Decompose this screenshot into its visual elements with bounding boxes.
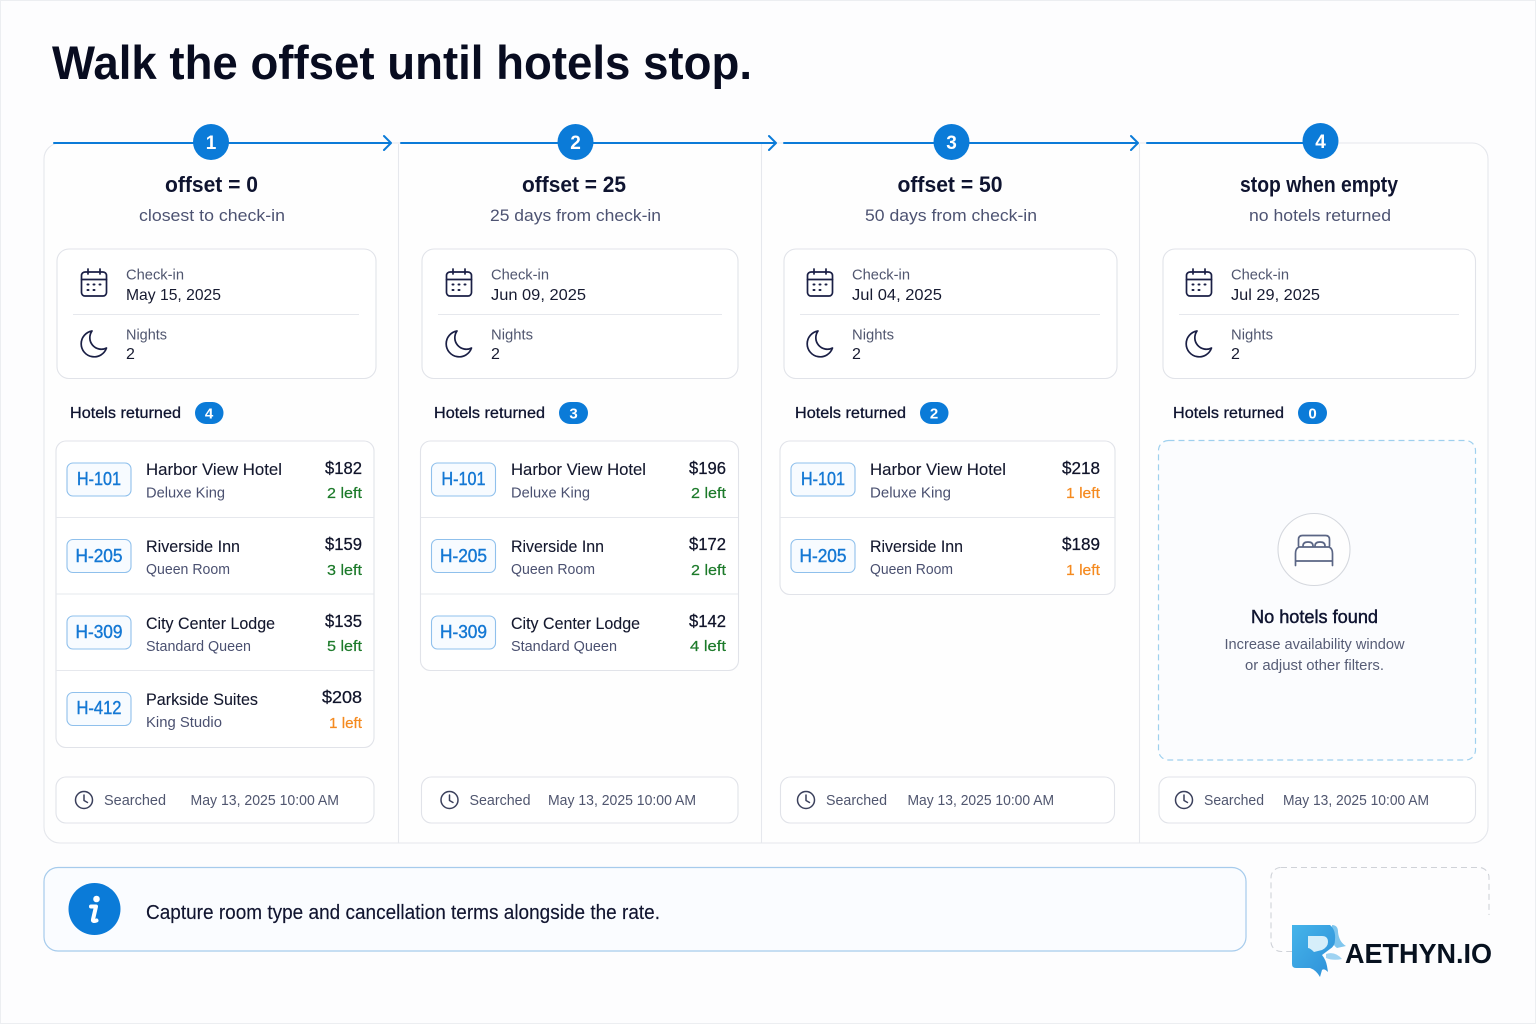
column 3 hotels returned count: Hotels returned bbox=[795, 405, 906, 422]
column 1 heading: offset = 0 bbox=[165, 172, 258, 197]
hotel row H-101: 2 left bbox=[691, 485, 727, 502]
hotel row H-101: Deluxe King bbox=[870, 484, 951, 502]
hotel row H-101: 2 left bbox=[327, 485, 363, 502]
check-in date: Jul 29, 2025 bbox=[1231, 287, 1320, 304]
nights: Nights bbox=[1231, 328, 1273, 344]
check-in date bbox=[1231, 268, 1320, 304]
empty state heading: No hotels found bbox=[1251, 607, 1378, 627]
empty dashed placeholder bbox=[1271, 868, 1489, 952]
column 1 hotels returned count: Hotels returned bbox=[70, 405, 181, 422]
check-in date: Jun 09, 2025 bbox=[491, 287, 586, 304]
nights bbox=[491, 328, 533, 363]
hotel row H-101 bbox=[67, 458, 363, 502]
check-in date: Jul 04, 2025 bbox=[852, 287, 942, 304]
check-in date: Check-in bbox=[852, 268, 910, 284]
check-in date: May 15, 2025 bbox=[126, 287, 221, 304]
icon: calendar bbox=[82, 269, 106, 296]
step marker 3 bbox=[934, 124, 970, 160]
column 3 query card bbox=[784, 249, 1117, 378]
hotel row H-309: H-309 bbox=[440, 622, 487, 642]
hotel row H-309 bbox=[432, 611, 727, 655]
column 3 hotels returned count: 2 bbox=[930, 406, 938, 422]
hotel row H-101: H-101 bbox=[801, 469, 845, 489]
nights: 2 bbox=[852, 346, 861, 363]
column 4 hotels returned count: 0 bbox=[1308, 406, 1317, 422]
title: Walk the offset until hotels stop. bbox=[52, 37, 752, 90]
column 2 hotels returned count: 3 bbox=[569, 406, 578, 422]
hotel row H-205: H-205 bbox=[440, 546, 487, 566]
step marker 2: 2 bbox=[570, 133, 581, 154]
check-in date: Check-in bbox=[126, 268, 184, 284]
hotel row H-309: Standard Queen bbox=[146, 638, 251, 655]
column 3: offset 50 bbox=[780, 172, 1117, 823]
column 2 subheading: 25 days from check-in bbox=[490, 206, 661, 225]
nights bbox=[126, 328, 167, 363]
hotel row H-205 bbox=[67, 534, 363, 579]
step marker 4: 4 bbox=[1315, 132, 1326, 153]
column 1 query card bbox=[57, 249, 376, 378]
column 3 hotel list bbox=[780, 441, 1115, 594]
logo: AETHYN.IO: AETHYN.IO bbox=[1345, 938, 1492, 969]
hotel row H-309: $135 bbox=[325, 611, 362, 631]
hotel row H-205: $189 bbox=[1062, 534, 1100, 554]
step marker 2 bbox=[558, 124, 594, 160]
nights: Nights bbox=[491, 328, 533, 344]
hotel row H-205: 2 left bbox=[691, 562, 727, 579]
step marker 4 bbox=[1302, 123, 1338, 159]
column 3 searched timestamp: Searched bbox=[826, 792, 887, 809]
nights: Nights bbox=[852, 328, 894, 344]
hotel row H-309: City Center Lodge bbox=[146, 614, 275, 633]
hotel row H-101: Harbor View Hotel bbox=[146, 460, 282, 479]
hotel row H-412: King Studio bbox=[146, 714, 222, 731]
hotel row H-309: H-309 bbox=[76, 622, 122, 642]
check-in date bbox=[852, 268, 942, 304]
column 1 hotel list bbox=[56, 441, 374, 748]
column 1 subheading: closest to check-in bbox=[139, 206, 285, 225]
hotel row H-101: $196 bbox=[689, 458, 726, 478]
hotel row H-101: H-101 bbox=[442, 469, 486, 489]
column 3 subheading: 50 days from check-in bbox=[865, 206, 1037, 225]
hotel row H-309: $142 bbox=[689, 611, 726, 631]
hotel row H-412: H-412 bbox=[76, 698, 122, 718]
hotel row H-412 bbox=[67, 687, 363, 732]
hotel row H-309: 5 left bbox=[327, 638, 363, 655]
hotel row H-205 bbox=[791, 534, 1101, 579]
column 3 heading: offset = 50 bbox=[898, 172, 1002, 197]
icon: calendar bbox=[1186, 269, 1212, 296]
icon: bed bbox=[1278, 514, 1350, 586]
hotel row H-205: Queen Room bbox=[146, 561, 230, 578]
hotel row H-205: Riverside Inn bbox=[146, 537, 240, 556]
column 4 heading: stop when empty bbox=[1240, 172, 1399, 197]
hotel row H-205: Queen Room bbox=[511, 561, 595, 578]
hotel row H-101: Deluxe King bbox=[511, 484, 590, 502]
empty state message: Increase availability window bbox=[1224, 637, 1405, 653]
icon: calendar bbox=[808, 269, 832, 296]
column 2 heading: offset = 25 bbox=[522, 172, 626, 197]
hotel row H-101: Harbor View Hotel bbox=[511, 460, 646, 479]
check-in date bbox=[126, 268, 221, 304]
hotel row H-205: 3 left bbox=[327, 562, 363, 579]
step marker 1: 1 bbox=[206, 133, 217, 154]
hotel row H-205: H-205 bbox=[800, 546, 846, 566]
hotel row H-205: $159 bbox=[325, 534, 362, 554]
check-in date: Check-in bbox=[1231, 268, 1289, 284]
column 4 searched timestamp bbox=[1159, 777, 1476, 823]
icon: calendar bbox=[446, 269, 472, 296]
column 4 searched timestamp: May 13, 2025 10:00 AM bbox=[1283, 792, 1429, 809]
hotel row H-101: Harbor View Hotel bbox=[870, 460, 1006, 479]
hotel row H-205: $172 bbox=[689, 534, 726, 554]
hotel row H-309: 4 left bbox=[690, 638, 727, 655]
column 4 hotels returned count: Hotels returned bbox=[1173, 405, 1284, 422]
column 1 hotels returned count bbox=[70, 402, 224, 424]
hotel row H-309: Standard Queen bbox=[511, 638, 617, 655]
panel: four-step container bbox=[44, 143, 1488, 843]
column 2 searched timestamp bbox=[422, 777, 738, 823]
column 1 searched timestamp: May 13, 2025 10:00 AM bbox=[190, 792, 339, 809]
icon: info bbox=[68, 883, 120, 935]
hotel row H-101: Deluxe King bbox=[146, 484, 225, 502]
hotel row H-205: Riverside Inn bbox=[511, 537, 604, 556]
empty state message bbox=[1224, 637, 1405, 674]
hotel row H-412: 1 left bbox=[329, 715, 363, 732]
hotel row H-412: Parkside Suites bbox=[146, 690, 258, 709]
icon: moon bbox=[81, 331, 106, 357]
logo: AETHYN.IO bbox=[1292, 925, 1492, 977]
empty state panel bbox=[1158, 440, 1476, 760]
column 1 searched timestamp: Searched bbox=[104, 792, 166, 809]
nights: 2 bbox=[126, 346, 135, 363]
column 2 hotel list bbox=[420, 441, 738, 670]
hotel row H-205: 1 left bbox=[1066, 562, 1101, 579]
hotel row H-205: Queen Room bbox=[870, 561, 953, 578]
hotel row H-309: City Center Lodge bbox=[511, 614, 640, 633]
hotel row H-101: $182 bbox=[325, 458, 362, 478]
column 4 query card bbox=[1163, 249, 1476, 378]
column 3 searched timestamp: May 13, 2025 10:00 AM bbox=[908, 792, 1054, 809]
callout text: Capture room type and cancellation terms alongside the rate. bbox=[146, 902, 660, 924]
hotel row H-101 bbox=[791, 458, 1101, 502]
empty state message: or adjust other filters. bbox=[1245, 658, 1384, 674]
callout: capture tip bbox=[44, 868, 1246, 951]
column 3 searched timestamp bbox=[780, 777, 1114, 823]
column 2: offset 25 bbox=[420, 172, 738, 823]
check-in date bbox=[491, 268, 586, 304]
hotel row H-101: H-101 bbox=[77, 469, 121, 489]
hotel row H-205: H-205 bbox=[76, 546, 122, 566]
step marker 1 bbox=[193, 124, 229, 160]
column 2 hotels returned count bbox=[434, 402, 588, 424]
hotel row H-205 bbox=[432, 534, 727, 579]
column 4: stop when empty bbox=[1158, 172, 1476, 823]
icon: moon bbox=[807, 331, 832, 357]
icon: moon bbox=[1186, 331, 1212, 357]
hotel row H-101: 1 left bbox=[1066, 485, 1101, 502]
column 4 searched timestamp: Searched bbox=[1204, 792, 1264, 809]
hotel row H-205: Riverside Inn bbox=[870, 537, 963, 556]
nights: Nights bbox=[126, 328, 167, 344]
hotel row H-101 bbox=[432, 458, 727, 502]
column 1 hotels returned count: 4 bbox=[205, 406, 214, 422]
column 2 searched timestamp: May 13, 2025 10:00 AM bbox=[548, 792, 696, 809]
column 4 hotels returned count bbox=[1173, 402, 1327, 424]
column 2 searched timestamp: Searched bbox=[470, 792, 530, 809]
hotel row H-101: $218 bbox=[1062, 458, 1100, 478]
hotel row H-309 bbox=[67, 611, 363, 655]
column 2 query card bbox=[422, 249, 738, 378]
column 1 searched timestamp bbox=[56, 777, 374, 823]
hotel row H-412: $208 bbox=[322, 687, 362, 707]
icon: moon bbox=[446, 331, 472, 357]
nights bbox=[852, 328, 894, 363]
column 1: offset 0 bbox=[56, 172, 376, 823]
nights: 2 bbox=[491, 346, 500, 363]
timeline arrows bbox=[54, 136, 1304, 150]
nights: 2 bbox=[1231, 346, 1240, 363]
column 2 hotels returned count: Hotels returned bbox=[434, 405, 545, 422]
step marker 3: 3 bbox=[946, 133, 957, 154]
nights bbox=[1231, 328, 1273, 363]
column 4 subheading: no hotels returned bbox=[1249, 206, 1391, 225]
column 3 hotels returned count bbox=[795, 402, 948, 424]
check-in date: Check-in bbox=[491, 268, 549, 284]
